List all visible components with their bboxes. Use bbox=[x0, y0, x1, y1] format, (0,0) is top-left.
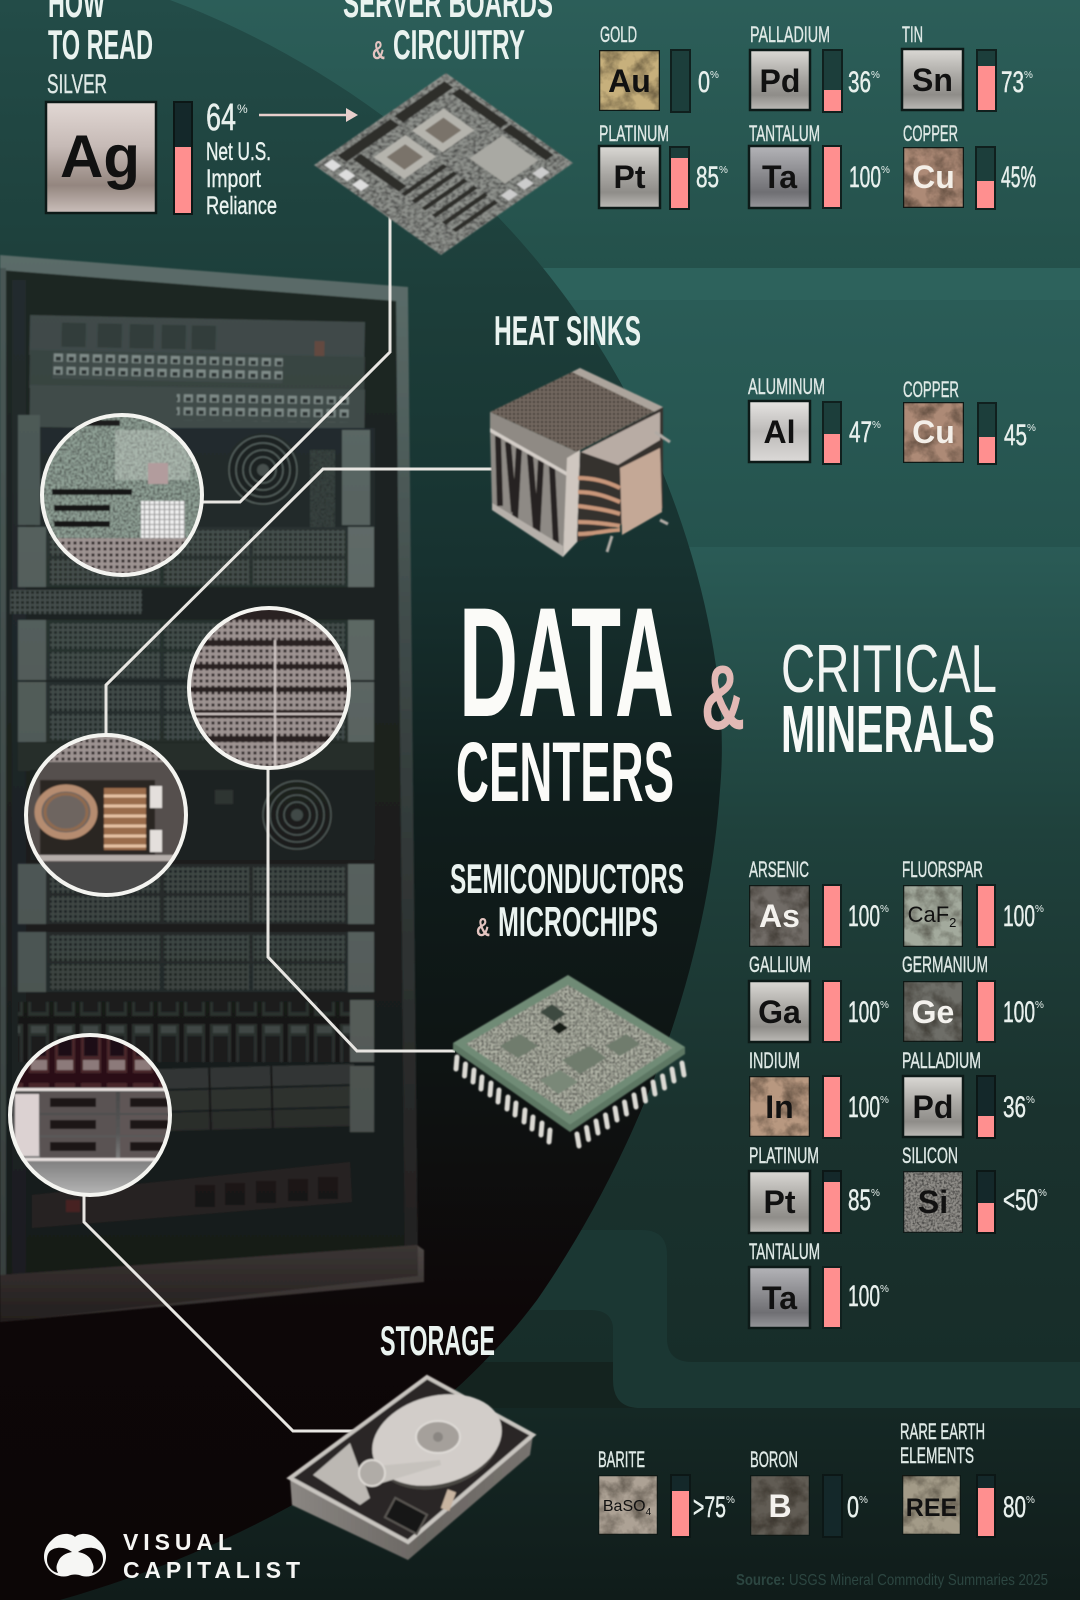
element card: palladium bbox=[750, 22, 880, 112]
element card: indium: In bbox=[765, 1089, 794, 1125]
heading: semiconductors and microchips: SEMICONDUCTORS bbox=[450, 855, 684, 902]
legend: silver example: Net U.S. bbox=[206, 138, 271, 166]
server rack photo bbox=[0, 255, 424, 1322]
element card: platinum: Pt bbox=[764, 1184, 796, 1220]
background panel: lower outline bbox=[480, 1230, 1080, 1408]
element card: gallium: Ga bbox=[758, 994, 801, 1030]
element card: tantalum: Ta bbox=[762, 1280, 797, 1316]
heading: server boards and circuitry: & bbox=[372, 35, 385, 65]
how to read heading bbox=[48, 0, 153, 68]
element card: platinum: Pt bbox=[614, 159, 646, 195]
icon: motherboard bbox=[314, 73, 573, 255]
element card: palladium bbox=[902, 1048, 1035, 1138]
element card: arsenic bbox=[749, 857, 889, 947]
element card: tin: Sn bbox=[912, 62, 953, 98]
element card: rare earth elements: REE bbox=[906, 1494, 957, 1522]
arrow: legend to board bbox=[259, 108, 358, 122]
legend: silver example: Reliance bbox=[206, 192, 277, 220]
legend: silver example: % bbox=[237, 102, 248, 116]
element card: copper bbox=[903, 377, 1036, 464]
element card: rare earth elements: RARE EARTH bbox=[900, 1419, 985, 1444]
background panel: critical minerals bbox=[0, 547, 1080, 1362]
element card: indium: % bbox=[880, 1095, 889, 1106]
element card: rare earth elements: ELEMENTS bbox=[900, 1443, 974, 1468]
element card: arsenic: 100 bbox=[848, 900, 880, 933]
legend: silver example: 64 bbox=[206, 97, 236, 139]
element card: palladium: % bbox=[1026, 1095, 1035, 1106]
element card: gallium: % bbox=[880, 1000, 889, 1011]
element card: palladium: 36 bbox=[848, 66, 871, 99]
element card: tin: % bbox=[1024, 70, 1033, 81]
element card: platinum: 85 bbox=[848, 1184, 871, 1217]
element card: gold: GOLD bbox=[600, 22, 637, 47]
element card: tin: 73 bbox=[1001, 66, 1024, 99]
element card: boron bbox=[750, 1447, 868, 1537]
element card: silicon: Si bbox=[918, 1184, 948, 1220]
element card: rare earth elements: % bbox=[1026, 1495, 1035, 1506]
icon: heat sink bbox=[490, 368, 670, 557]
icon: microchip bbox=[453, 975, 685, 1146]
element card: tantalum: Ta bbox=[762, 159, 797, 195]
element card: platinum: PLATINUM bbox=[599, 121, 669, 146]
element card: aluminum: % bbox=[872, 420, 881, 431]
background panel: upper band bbox=[0, 268, 1080, 300]
element card: tantalum bbox=[749, 1239, 889, 1328]
element card: gallium: 100 bbox=[848, 996, 880, 1029]
element card: boron: BORON bbox=[750, 1447, 798, 1472]
legend: silver example bbox=[46, 69, 277, 220]
magnifier: copper heat pipes bbox=[25, 734, 190, 899]
background panel: heat sinks bbox=[0, 300, 1080, 547]
title: critical minerals bbox=[781, 631, 997, 767]
heading: semiconductors and microchips bbox=[450, 855, 684, 945]
element card: copper: 45% bbox=[1001, 161, 1036, 194]
element card: germanium: GERMANIUM bbox=[902, 952, 988, 977]
dark arc panel bbox=[0, 0, 722, 1600]
element card: germanium: 100 bbox=[1003, 996, 1035, 1029]
element card: copper: Cu bbox=[912, 414, 955, 450]
element card: barite: BARITE bbox=[598, 1447, 645, 1472]
element card: indium: INDIUM bbox=[749, 1048, 800, 1073]
element card: tantalum: % bbox=[880, 1284, 889, 1295]
element card: aluminum: Al bbox=[764, 414, 796, 450]
element card: platinum: 85 bbox=[696, 161, 719, 194]
element card: rare earth elements: 80 bbox=[1003, 1491, 1026, 1524]
element card: copper: 45 bbox=[1004, 419, 1027, 452]
element card: indium: 100 bbox=[848, 1091, 880, 1124]
element card: silicon: SILICON bbox=[902, 1143, 958, 1168]
element card: gold bbox=[599, 22, 719, 112]
element card: tantalum: 100 bbox=[848, 1280, 880, 1313]
element card: tantalum: 100 bbox=[849, 161, 881, 194]
connector: heat sinks bbox=[106, 469, 492, 740]
element card: germanium: Ge bbox=[912, 994, 954, 1030]
element card: boron: % bbox=[859, 1495, 868, 1506]
element card: barite: % bbox=[726, 1495, 735, 1506]
element card: germanium bbox=[902, 952, 1044, 1042]
element card: gallium: GALLIUM bbox=[749, 952, 811, 977]
element card: barite: >75 bbox=[693, 1491, 726, 1524]
element card: platinum: PLATINUM bbox=[749, 1143, 819, 1168]
element card: tantalum bbox=[749, 121, 890, 208]
heading: heat sinks: HEAT SINKS bbox=[494, 307, 641, 354]
element card: copper bbox=[903, 121, 1036, 209]
element card: platinum bbox=[599, 121, 728, 209]
legend: silver example: Ag bbox=[60, 123, 140, 190]
element card: arsenic: As bbox=[759, 898, 800, 934]
connector: semiconductors bbox=[268, 766, 455, 1051]
element card: palladium: PALLADIUM bbox=[902, 1048, 981, 1073]
element card: tin bbox=[902, 22, 1033, 111]
element card: aluminum: ALUMINUM bbox=[748, 374, 825, 399]
magnifier: server bays bbox=[188, 608, 350, 770]
magnifier: circuit board bbox=[40, 412, 205, 580]
logo: visual capitalist: VISUAL bbox=[123, 1529, 232, 1555]
element card: palladium: % bbox=[871, 70, 880, 81]
element card: copper: % bbox=[1027, 423, 1036, 434]
element card: copper: COPPER bbox=[903, 121, 958, 146]
title: data centers: DATA bbox=[459, 576, 674, 750]
element card: aluminum bbox=[748, 374, 881, 464]
title: data centers: CENTERS bbox=[456, 725, 674, 819]
element card: tantalum: % bbox=[881, 165, 890, 176]
element card: fluorspar: 2 bbox=[949, 915, 956, 930]
element card: fluorspar: CaF bbox=[908, 902, 949, 927]
element card: boron: 0 bbox=[847, 1491, 859, 1524]
element card: platinum: % bbox=[719, 165, 728, 176]
title: data centers bbox=[456, 576, 674, 819]
logo: visual capitalist bbox=[44, 1529, 300, 1583]
heading: storage: STORAGE bbox=[380, 1317, 495, 1364]
connector: storage bbox=[84, 1192, 372, 1431]
element card: barite bbox=[598, 1447, 735, 1537]
icon: hard drive bbox=[290, 1377, 533, 1560]
magnifier: drive bays bbox=[9, 1034, 175, 1199]
connector: server boards bbox=[200, 215, 390, 502]
element card: tantalum: TANTALUM bbox=[749, 121, 820, 146]
element card: tin: TIN bbox=[902, 22, 923, 47]
background panel: top bbox=[0, 0, 1080, 268]
element card: platinum bbox=[749, 1143, 880, 1233]
element card: aluminum: 47 bbox=[849, 416, 872, 449]
legend: silver example: SILVER bbox=[47, 69, 107, 99]
heading: server boards and circuitry: CIRCUITRY bbox=[393, 21, 525, 68]
title ampersand: & bbox=[701, 647, 745, 749]
element card: fluorspar: FLUORSPAR bbox=[902, 857, 983, 882]
element card: gallium bbox=[749, 952, 889, 1042]
element card: copper: COPPER bbox=[903, 377, 959, 402]
logo: visual capitalist: CAPITALIST bbox=[123, 1557, 300, 1583]
element card: barite: 4 bbox=[646, 1507, 652, 1518]
element card: arsenic: ARSENIC bbox=[749, 857, 809, 882]
element card: fluorspar bbox=[902, 857, 1044, 947]
element card: fluorspar: 100 bbox=[1003, 900, 1035, 933]
element card: tantalum: TANTALUM bbox=[749, 1239, 820, 1264]
element card: gold: % bbox=[710, 70, 719, 81]
heading: server boards and circuitry bbox=[343, 0, 553, 68]
element card: platinum: % bbox=[871, 1188, 880, 1199]
element card: indium bbox=[749, 1048, 889, 1138]
heading: semiconductors and microchips: & bbox=[476, 912, 490, 942]
element card: palladium: Pd bbox=[760, 63, 800, 99]
element card: silicon: <50 bbox=[1003, 1184, 1038, 1217]
legend: silver example: Import bbox=[206, 165, 261, 193]
element card: germanium: % bbox=[1035, 1000, 1044, 1011]
how to read heading: TO READ bbox=[48, 21, 153, 68]
element card: rare earth elements bbox=[900, 1419, 1035, 1537]
element card: gold: Au bbox=[608, 63, 651, 99]
heading: semiconductors and microchips: MICROCHIPS bbox=[498, 898, 658, 945]
background panel: bottom bbox=[0, 1408, 1080, 1600]
element card: palladium: Pd bbox=[913, 1089, 953, 1125]
element card: palladium: 36 bbox=[1003, 1091, 1026, 1124]
element card: palladium: PALLADIUM bbox=[750, 22, 830, 47]
element card: arsenic: % bbox=[880, 904, 889, 915]
element card: copper: Cu bbox=[912, 159, 955, 195]
element card: gold: 0 bbox=[698, 66, 710, 99]
element card: barite: BaSO bbox=[603, 1498, 646, 1515]
element card: fluorspar: % bbox=[1035, 904, 1044, 915]
element card: silicon: % bbox=[1038, 1188, 1047, 1199]
element card: boron: B bbox=[768, 1488, 792, 1524]
element card: silicon bbox=[902, 1143, 1047, 1233]
